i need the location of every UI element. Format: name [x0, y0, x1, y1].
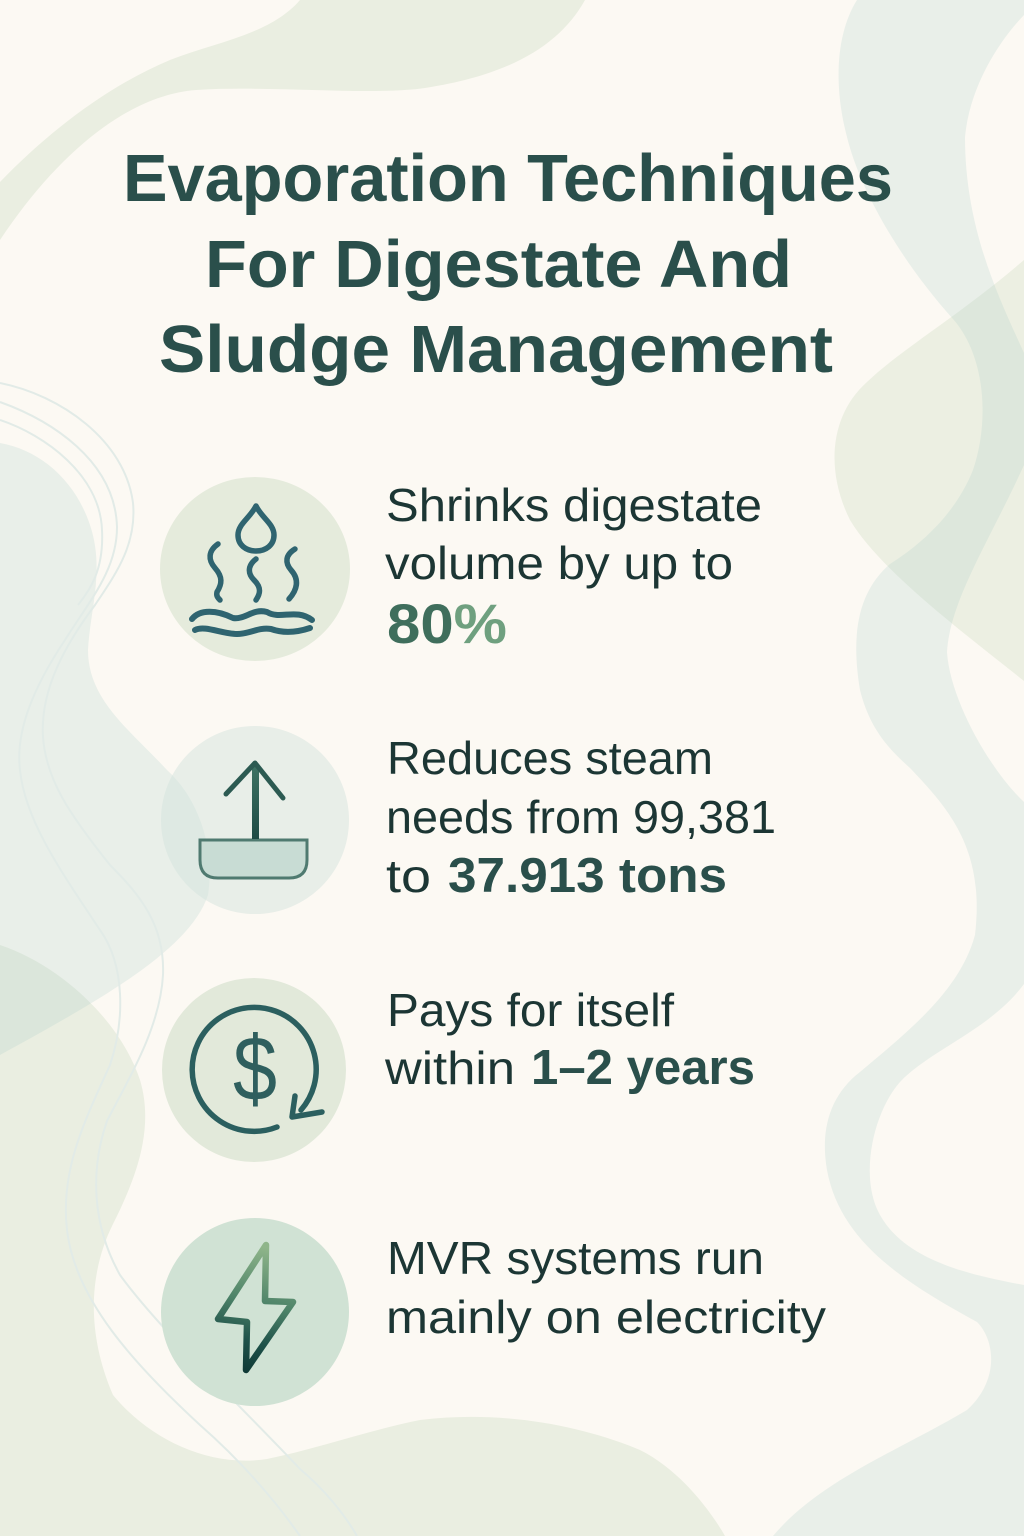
text: shrinks digestate volume: volume by up to: [385, 537, 733, 589]
icon: lightning bolt: [161, 1218, 349, 1406]
text: reduces steam needs: 37.913 tons: [448, 849, 727, 903]
text: shrinks digestate volume: 80%: [387, 592, 507, 655]
title: Sludge Management: [159, 312, 833, 387]
text: shrinks digestate volume: Shrinks digestate: [386, 479, 762, 531]
row 4: electricity: [161, 1218, 826, 1406]
title: For Digestate And: [205, 227, 792, 302]
icon: dollar with return arrow: $: [233, 1018, 277, 1120]
text: reduces steam needs: Reduces steam: [387, 732, 713, 784]
text: reduces steam needs: [386, 732, 776, 903]
text: pays for itself: [384, 984, 755, 1095]
row 3: payback: [162, 978, 755, 1162]
row 1: digestate volume: [160, 477, 762, 661]
text: pays for itself: within: [384, 1042, 515, 1094]
icon: dollar with return arrow: [162, 978, 346, 1162]
title: Evaporation Techniques: [123, 141, 893, 216]
text: MVR systems: [386, 1232, 826, 1343]
text: shrinks digestate volume: [385, 479, 762, 655]
title: [123, 141, 893, 387]
text: reduces steam needs: to: [386, 850, 431, 902]
icon: arrow rising from tray: [161, 726, 349, 914]
text: MVR systems: mainly on electricity: [386, 1291, 826, 1343]
text: MVR systems: MVR systems run: [387, 1232, 764, 1284]
row 2: steam needs: [161, 726, 776, 914]
text: pays for itself: Pays for itself: [387, 984, 674, 1036]
text: reduces steam needs: needs from 99,381: [386, 791, 776, 843]
text: pays for itself: 1–2 years: [531, 1041, 755, 1095]
icon: evaporating water: [160, 477, 350, 661]
